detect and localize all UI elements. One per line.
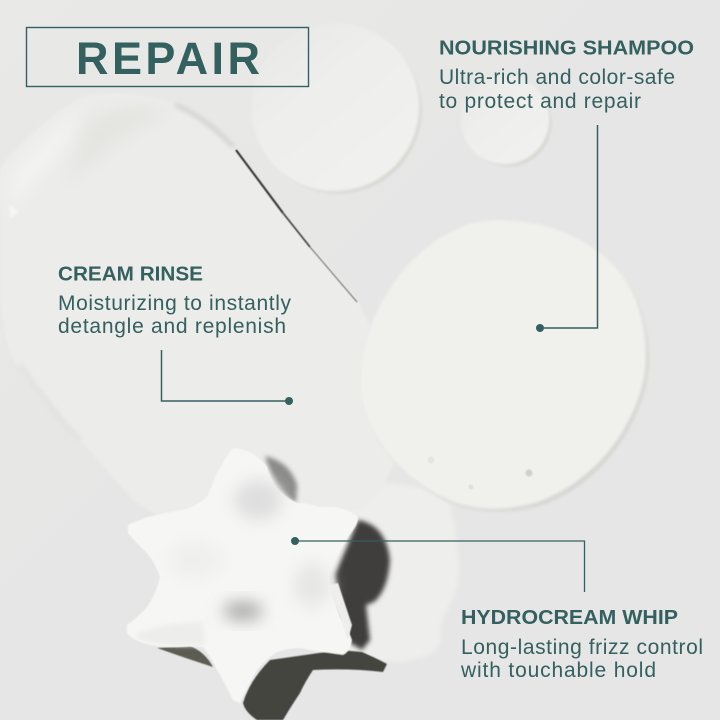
round cream drop: upper [251, 23, 422, 194]
label: Hydrocream Whip [460, 607, 703, 682]
label: Hydrocream Whip: with touchable hold [460, 659, 656, 682]
dark crease along smear edge [175, 105, 357, 302]
label: Cream Rinse: CREAM RINSE [58, 264, 203, 286]
label: Nourishing Shampoo: Ultra-rich and color-safe [439, 66, 675, 89]
large round shampoo drop [360, 220, 650, 512]
label: Hydrocream Whip: Long-lasting frizz control [461, 636, 703, 659]
arrow: cream rinse leader [162, 350, 293, 405]
label: Nourishing Shampoo: to protect and repair [439, 90, 641, 113]
label: Cream Rinse [58, 264, 292, 338]
title box: REPAIR [26, 28, 308, 86]
label: Cream Rinse: detangle and replenish [58, 315, 286, 338]
arrow: shampoo leader [536, 125, 598, 332]
round cream drop: small [461, 76, 552, 167]
label: Nourishing Shampoo [439, 38, 694, 113]
title: REPAIR [76, 33, 260, 84]
arrow: whip leader [291, 537, 584, 592]
star-shaped whip [127, 448, 358, 703]
label: Hydrocream Whip: HYDROCREAM WHIP [461, 607, 678, 629]
label: Nourishing Shampoo: NOURISHING SHAMPOO [439, 38, 694, 60]
cream rinse smear [0, 93, 400, 515]
whip smear under the star [330, 480, 459, 662]
star shadow [157, 456, 390, 720]
label: Cream Rinse: Moisturizing to instantly [58, 292, 292, 315]
